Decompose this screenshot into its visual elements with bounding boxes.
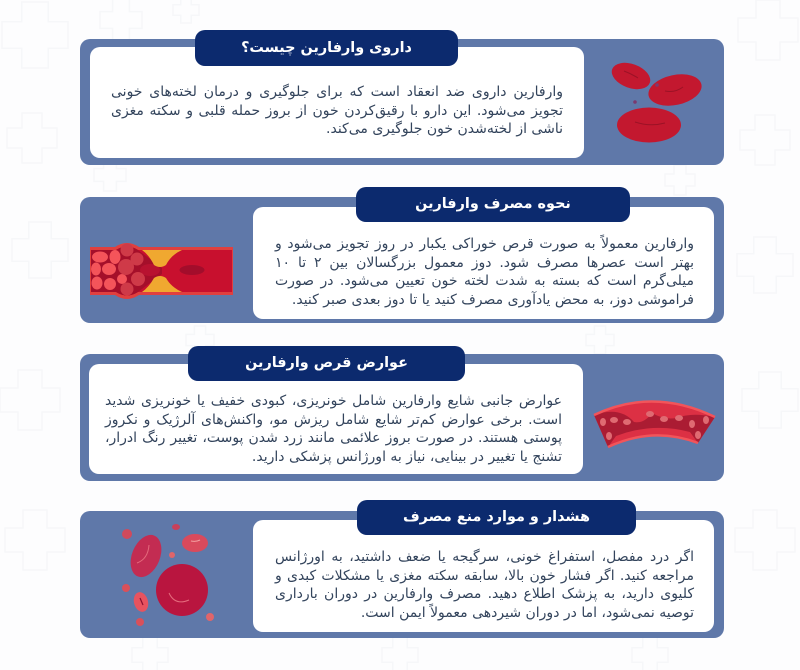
body text: عوارض جانبی شایع وارفارین شامل خونریزی، کبودی خفیف یا خونریزی شدید <box>105 393 562 409</box>
body text: کلیوی دارید، به پزشک اطلاع دهید. مصرف وارفارین در دوران بارداری <box>275 586 694 602</box>
body text <box>274 548 694 621</box>
text card <box>89 364 583 474</box>
body text: مراجعه کنید. اگر فشار خون بالا، سابقه سکته مغزی یا مشکلات کبدی و <box>275 568 694 584</box>
panel: how to use <box>80 197 724 323</box>
heading: what is warfarin <box>195 30 458 66</box>
body text: است. برخی عوارض کم‌تر شایع شامل ریزش مو، واکنش‌های آلرژیک و نکروز <box>105 412 562 428</box>
body text <box>274 234 694 308</box>
panel: warnings <box>80 511 724 638</box>
illustration: narrowed artery <box>90 243 233 299</box>
illustration: curved vessel <box>594 400 716 448</box>
body text: فراموشی دوز، به محض یادآوری مصرف کنید یا تا دوز بعدی صبر کنید. <box>292 292 694 308</box>
panel: side effects <box>80 354 724 481</box>
body text: پوستی هستند. در صورت بروز علائمی مانند زرد شدن پوست، تغییر رنگ ادرار، <box>105 430 562 446</box>
heading: side effects: عوارض قرص وارفارین <box>245 355 408 371</box>
text card <box>253 207 714 319</box>
heading: how to use: نحوه مصرف وارفارین <box>415 196 571 212</box>
body text: تشنج یا تغییر در بینایی، نیاز به اورژانس پزشکی دارید. <box>252 449 562 465</box>
heading: how to use <box>356 187 630 222</box>
body text: وارفارین داروی ضد انعقاد است که برای جلوگیری و درمان لخته‌های خونی <box>111 84 563 100</box>
body text: بهتر است عصرها مصرف شود. دوز معمول بزرگسالان بین ۲ تا ۱۰ <box>275 255 694 271</box>
heading: warnings: هشدار و موارد منع مصرف <box>403 509 590 525</box>
body text: میلی‌گرم است که بسته به شدت لخته خون تعیین می‌شود. در صورت <box>275 273 694 289</box>
body text: تجویز می‌شود. این دارو با رقیق‌کردن خون از بروز حمله قلبی و سکته مغزی <box>111 103 563 119</box>
text card <box>253 520 714 632</box>
body text <box>104 393 562 465</box>
body text: اگر درد مفصل، استفراغ خونی، سرگیجه یا ضعف داشتید، به اورژانس <box>275 549 694 565</box>
body text: ناشی از لخته‌شدن خون جلوگیری می‌کند. <box>326 121 563 137</box>
body text <box>111 84 563 137</box>
panel: what is warfarin <box>80 39 724 165</box>
illustration: scattered blood cells <box>122 524 214 626</box>
heading: what is warfarin: داروی وارفارین چیست؟ <box>241 40 412 56</box>
body text: توصیه نمی‌شود، اما در دوران شیردهی معمولاً ایمن است. <box>361 605 694 621</box>
text card <box>90 47 584 158</box>
body text: وارفارین معمولاً به صورت قرص خوراکی یکبار در روز تجویز می‌شود و <box>275 236 694 252</box>
heading: side effects <box>188 346 465 381</box>
icon: red blood cells <box>612 62 702 142</box>
heading: warnings <box>357 500 636 535</box>
